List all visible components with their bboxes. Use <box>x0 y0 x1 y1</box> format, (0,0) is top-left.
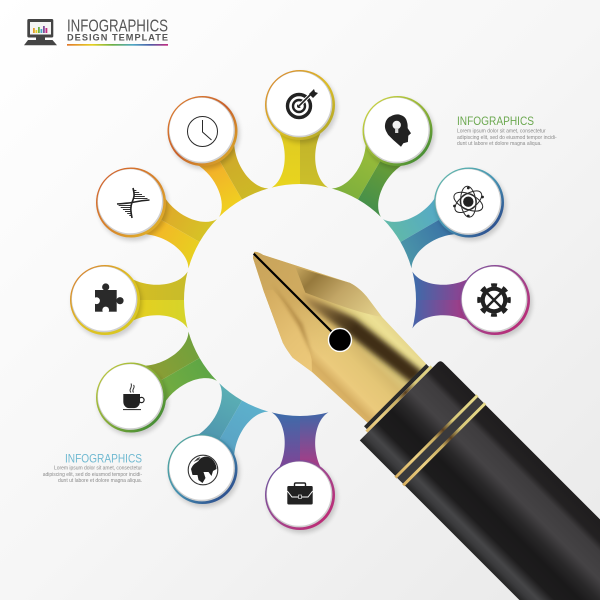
icon: briefcase <box>287 483 313 504</box>
icon: monitor with bar chart <box>24 19 57 45</box>
heading: infographics: INFOGRAPHICS <box>67 16 168 36</box>
badge <box>70 265 142 338</box>
body text: Lorem ipsum dolor sit amet, consectetur <box>54 466 142 472</box>
collar ring <box>363 363 433 433</box>
barrel rings <box>394 394 486 486</box>
connector <box>190 383 268 461</box>
badge <box>460 265 532 338</box>
body text: Lorem ipsum dolor sit amet, consectetur <box>457 128 546 134</box>
connector <box>272 412 328 470</box>
node: head with lightbulb <box>332 96 434 217</box>
body text: dunt ut labore et dolore magna aliqua. <box>457 141 542 147</box>
subheading: design template: DESIGN TEMPLATE <box>67 33 168 43</box>
node: coffee cup <box>96 332 217 436</box>
icon: DNA helix <box>117 188 150 218</box>
rainbow underline <box>67 44 168 46</box>
body text: adipiscing elit, sed do eiusmod tempor incidi- <box>457 135 557 141</box>
logo: monitor icon and header title <box>24 16 168 46</box>
text block: top right <box>457 114 557 147</box>
text block: bottom left <box>43 451 142 484</box>
icon: gear <box>479 285 509 315</box>
icon: globe <box>188 455 218 485</box>
icon: head with lightbulb <box>385 114 411 147</box>
node: briefcase <box>265 412 337 533</box>
body text: adipiscing elit, sed do eiusmod tempor incidi- <box>43 472 142 478</box>
connector <box>383 190 461 268</box>
fountain pen <box>252 252 600 600</box>
body text: dunt ut labore et dolore magna aliqua. <box>58 478 142 484</box>
badge <box>168 434 240 507</box>
icon: atom <box>451 186 486 218</box>
nib slit and breather hole <box>246 246 356 356</box>
heading: INFOGRAPHICS <box>457 114 534 128</box>
icon: clock <box>188 116 218 146</box>
badge <box>265 460 337 533</box>
node: puzzle piece <box>70 265 188 338</box>
icon: puzzle piece <box>93 283 124 313</box>
node: globe <box>168 383 268 507</box>
node: DNA <box>96 168 217 268</box>
icon: target with arrow <box>288 89 318 118</box>
icon: coffee cup <box>123 384 144 410</box>
barrel <box>360 361 600 600</box>
badge <box>434 168 506 240</box>
connector <box>272 130 328 188</box>
body text <box>457 128 557 147</box>
nib <box>252 252 427 423</box>
heading: INFOGRAPHICS <box>65 451 142 465</box>
connector <box>190 139 268 217</box>
node: atom <box>383 168 506 268</box>
connector <box>139 332 217 410</box>
badge <box>362 96 434 169</box>
badge <box>96 168 168 240</box>
body text <box>43 466 142 484</box>
connector <box>412 272 470 328</box>
node: gear <box>412 265 532 338</box>
node: target <box>265 70 337 188</box>
connector <box>139 190 217 268</box>
node: clock <box>168 96 268 217</box>
connector <box>332 139 410 217</box>
connector <box>130 272 188 328</box>
badge <box>265 70 337 143</box>
badge <box>96 362 168 436</box>
badge <box>168 96 240 169</box>
